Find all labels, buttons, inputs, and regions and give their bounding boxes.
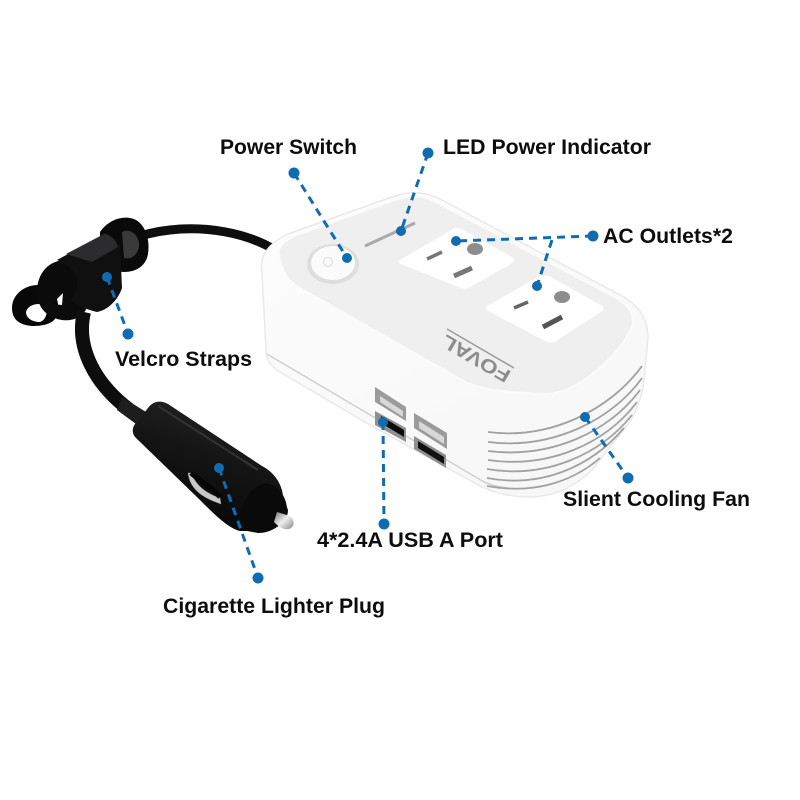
cable and velcro strap bundle xyxy=(12,218,275,424)
power switch xyxy=(307,244,359,284)
callout: LED power indicator: LED Power Indicator xyxy=(443,135,652,159)
USB ports xyxy=(375,387,447,468)
callout: AC outlets: AC Outlets*2 xyxy=(603,224,733,248)
velcro strap xyxy=(57,233,122,312)
metal tip xyxy=(274,512,294,529)
cable to inverter xyxy=(118,229,275,250)
callout: power switch xyxy=(220,135,357,263)
upper cable loop xyxy=(100,218,148,272)
middle cable loop xyxy=(37,260,90,320)
FOVAL logo: FOVAL xyxy=(438,329,514,386)
callout: silent cooling fan: Slient Cooling Fan xyxy=(563,487,750,511)
small left loop xyxy=(12,285,58,326)
callout: cigarette lighter plug xyxy=(163,463,385,618)
top face xyxy=(279,196,633,394)
callout: USB ports: 4*2.4A USB A Port xyxy=(317,528,503,552)
callout: power switch: Power Switch xyxy=(220,135,357,159)
callout: LED power indicator xyxy=(396,135,652,236)
callout: AC outlets xyxy=(451,224,733,291)
cigarette lighter plug xyxy=(133,402,294,533)
cable down to plug xyxy=(82,312,138,416)
callout: velcro straps xyxy=(102,272,252,371)
inverter body xyxy=(261,193,648,497)
AC outlet 2 xyxy=(486,275,603,343)
callout: silent cooling fan xyxy=(563,412,750,511)
callout: cigarette lighter plug: Cigarette Lighter Plug xyxy=(163,594,385,618)
side spring clip xyxy=(188,473,221,504)
callout: velcro straps: Velcro Straps xyxy=(115,347,252,371)
strain relief xyxy=(117,397,146,424)
white shell xyxy=(261,193,648,497)
AC outlet 1 xyxy=(399,228,514,289)
shell seam xyxy=(267,354,552,489)
plug barrel xyxy=(133,402,288,531)
LED indicator xyxy=(365,223,415,246)
callout: USB ports xyxy=(317,417,503,552)
cooling vents xyxy=(487,366,642,489)
